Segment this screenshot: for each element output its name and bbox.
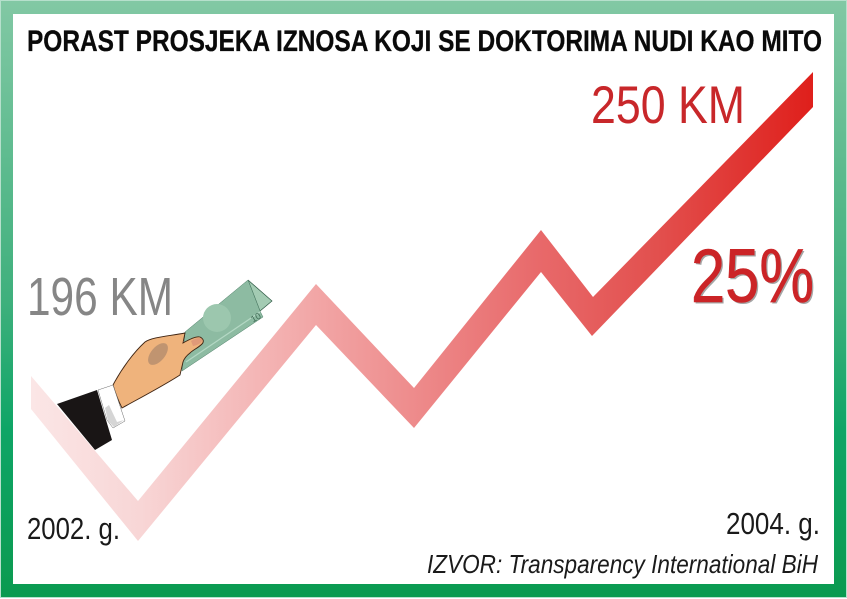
end year: 2004. g.	[726, 506, 820, 541]
start value: 196 KM	[27, 267, 173, 327]
end value: 250 KM	[591, 76, 745, 135]
thumb nail	[191, 338, 202, 346]
shirt cuff	[98, 385, 125, 428]
banknote watermark	[203, 304, 231, 332]
start year: 2002. g.	[27, 511, 120, 546]
suit sleeve	[57, 390, 112, 450]
banknote	[182, 280, 263, 371]
banknote back fold	[248, 280, 272, 311]
percentage increase: 25%	[692, 236, 816, 320]
percentage increase: 25%	[691, 234, 814, 319]
banknote lower stripe	[186, 312, 260, 362]
rising zigzag line	[31, 72, 813, 541]
banknote denomination: 10	[249, 311, 263, 324]
cuff shadow	[105, 405, 124, 427]
hand shading	[144, 340, 172, 368]
icon: hand holding banknote	[57, 280, 272, 450]
hand	[113, 333, 203, 408]
